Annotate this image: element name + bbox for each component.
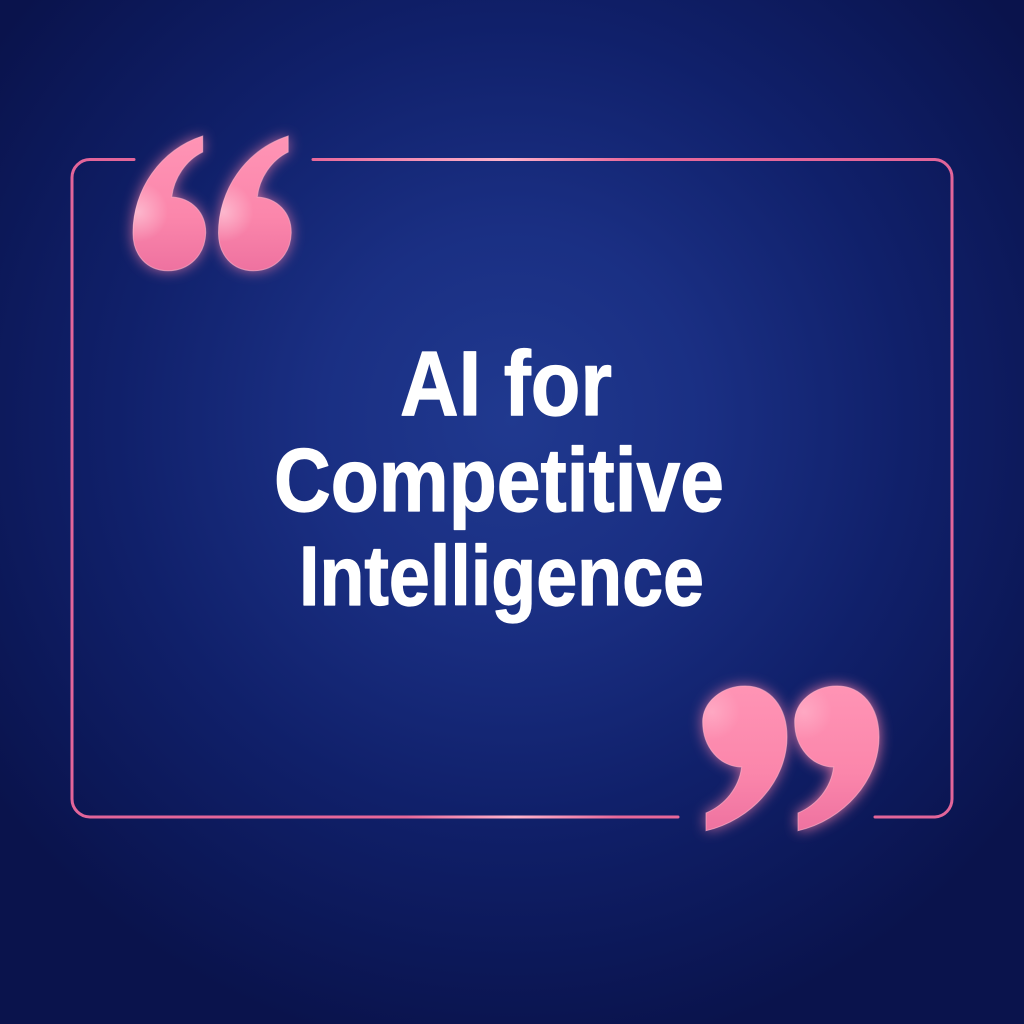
title: AI for	[400, 333, 612, 435]
title: Intelligence	[299, 529, 704, 623]
icon: opening quotation mark	[133, 136, 291, 271]
title: Competitive	[274, 431, 724, 531]
title	[274, 333, 724, 623]
rounded frame with gaps for the quotation marks	[72, 160, 952, 817]
icon: closing quotation mark	[703, 686, 879, 831]
